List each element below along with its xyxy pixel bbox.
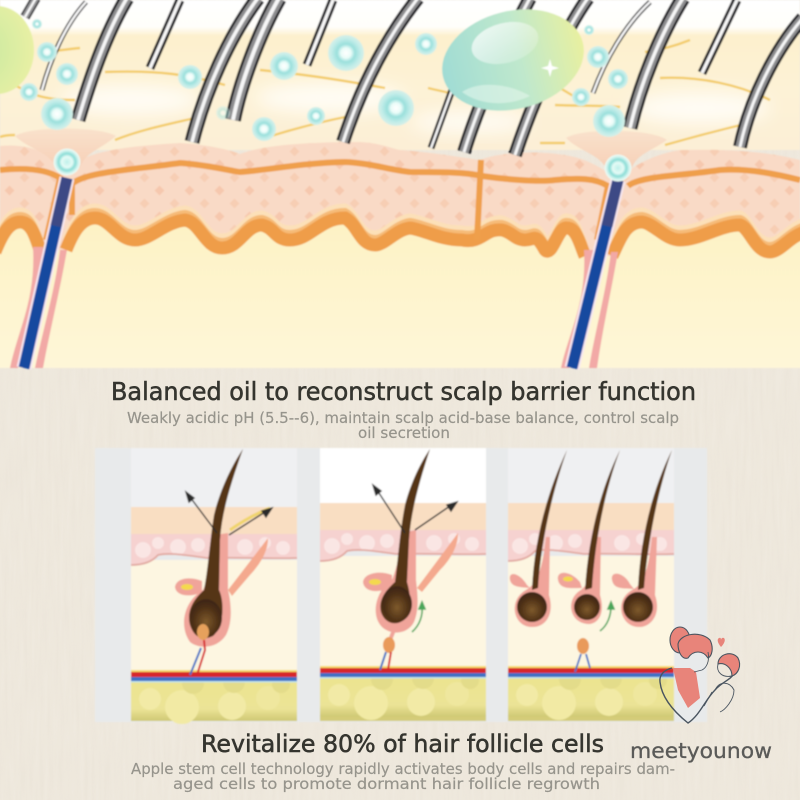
text: follicle description line 1: Apple stem cell technology rapidly activates body cells and repairs dam- bbox=[131, 760, 675, 778]
arrows bbox=[186, 492, 272, 535]
skin layer bbox=[0, 142, 800, 270]
yellow oil strands bbox=[0, 40, 770, 145]
growth arrow bbox=[412, 602, 425, 632]
follicle 1 bbox=[510, 450, 567, 627]
hair shafts bbox=[25, 0, 800, 155]
scalp cross-section illustration bbox=[0, 0, 800, 368]
watermark logo bbox=[630, 627, 772, 763]
text: follicle description line 2: aged cells to promote dormant hair follicle regrowth bbox=[173, 775, 600, 793]
micro-droplets bbox=[20, 19, 632, 182]
large oil droplet centre bbox=[431, 0, 595, 125]
heading: scalp barrier: Balanced oil to reconstruct scalp barrier function bbox=[111, 377, 696, 406]
arrows bbox=[373, 485, 457, 533]
text: scalp barrier description line 1: Weakly acidic pH (5.5--6), maintain scalp acid-base balance, control scalp bbox=[127, 409, 679, 427]
subcutaneous cream layer bbox=[0, 218, 800, 368]
mid orange band bbox=[0, 212, 800, 250]
panel 3 bbox=[508, 448, 674, 721]
light orange band bbox=[0, 207, 800, 245]
icon: mother and baby bbox=[660, 627, 740, 723]
surface and oil layer bbox=[0, 0, 800, 150]
heading: follicle cells: Revitalize 80% of hair follicle cells bbox=[201, 730, 604, 758]
large oil droplet left bbox=[0, 6, 34, 94]
watermark text: meetyounow bbox=[630, 739, 772, 763]
panel backdrop bbox=[95, 448, 707, 722]
follicle 2 bbox=[558, 450, 620, 624]
follicle 3 bbox=[612, 450, 672, 627]
growth arrow bbox=[600, 602, 614, 631]
follicle left bbox=[10, 128, 116, 368]
orange dermis band bbox=[0, 218, 800, 256]
panel 2 bbox=[320, 448, 486, 721]
panel group: follicle stages bbox=[95, 448, 707, 724]
panel 1 bbox=[131, 448, 297, 724]
orange mid-line bbox=[0, 160, 800, 240]
follicle right bbox=[561, 131, 667, 368]
text: scalp barrier description line 2: oil secretion bbox=[358, 424, 450, 442]
